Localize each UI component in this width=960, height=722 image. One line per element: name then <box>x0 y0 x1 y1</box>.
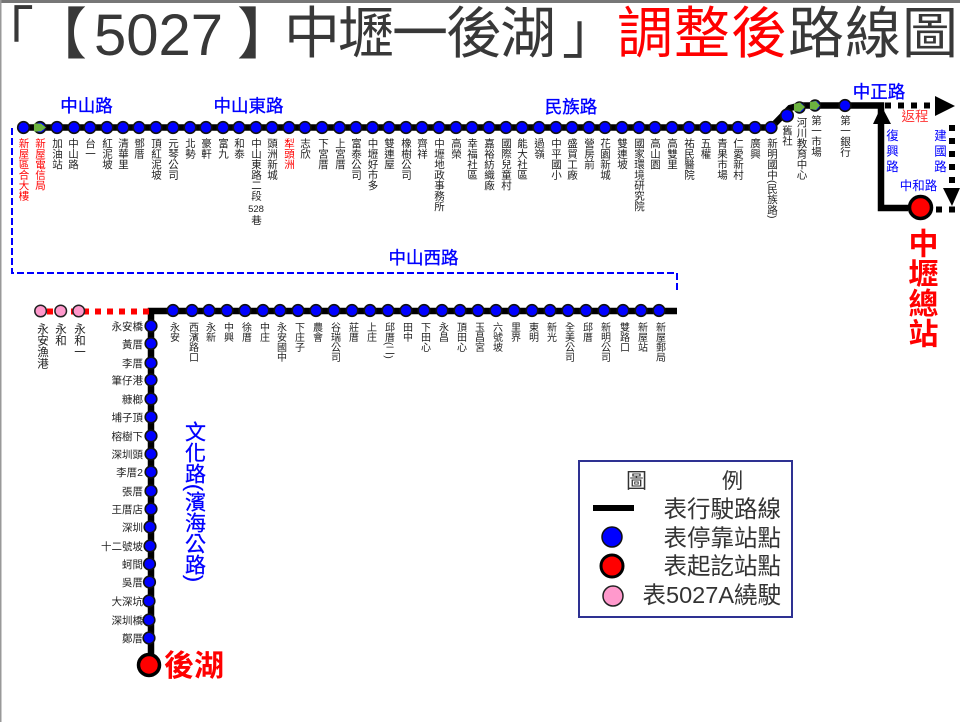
5027A stop labels <box>36 322 86 369</box>
lower stop labels: 里界 <box>508 322 520 343</box>
upper stop labels: 嘉裕紡織廠 <box>483 137 495 191</box>
upper stop labels: 過嶺 <box>533 137 545 160</box>
legend: stop: 表停靠站點 <box>664 525 781 551</box>
route: upper main line <box>18 106 908 208</box>
label: 後湖: 後湖 <box>164 650 224 683</box>
lower stop labels: 新明公司 <box>598 321 610 362</box>
legend heading: 例 <box>722 470 743 493</box>
upper stop labels: 五權 <box>700 138 712 160</box>
legend: 5027A detour: 表5027A繞駛 <box>643 582 781 608</box>
upper stop labels: 和泰 <box>233 138 245 159</box>
lower stop labels: 中庄 <box>258 321 270 343</box>
upper stop labels: 上宮厝 <box>334 138 346 170</box>
文化路 stop labels: 筆仔港 <box>112 374 143 387</box>
文化路 stop labels: 黃厝 <box>122 338 143 351</box>
upper stop labels: 仁愛新村 <box>732 138 744 180</box>
文化路 stop labels: 鄭厝 <box>122 632 143 645</box>
upper stop labels: 新屋電信局 <box>34 137 46 191</box>
upper stop labels: 清華里 <box>117 137 129 170</box>
label: 中壢總站: 中壢總站 <box>904 228 938 348</box>
lower stop labels: 西濱路口 <box>186 322 198 362</box>
legend: route line <box>593 496 781 522</box>
upper stop labels: 廣興 <box>749 137 761 160</box>
lower stop labels: 東明 <box>526 321 538 343</box>
文化路 stop labels: 深圳頭 <box>112 448 143 461</box>
upper stop labels: 雙連屋 <box>383 137 395 170</box>
lower stop labels <box>168 321 666 363</box>
upper stop labels: 第一市場 <box>810 114 822 158</box>
route: lower main line <box>151 311 677 665</box>
title: 中壢一後湖 <box>284 2 556 65</box>
upper stop labels: 北勢 <box>184 138 196 160</box>
lower stop labels: 徐厝 <box>240 321 252 343</box>
road labels: 中正路 <box>853 82 906 102</box>
文化路 stop labels: 大深坑 <box>112 595 143 608</box>
title: 」 <box>562 2 618 65</box>
legend: stop <box>602 525 781 551</box>
upper stop labels: 志欣 <box>299 137 311 160</box>
upper stop labels: 營房前 <box>583 137 595 170</box>
lower stop labels: 下田心 <box>418 322 430 352</box>
upper stop labels: 幸福社區 <box>466 138 478 180</box>
upper stop labels: 河川教育中心 <box>796 117 808 180</box>
lower stop labels: 田中 <box>400 322 412 343</box>
upper stop labels: 新屋區合大樓 <box>18 137 30 202</box>
lower stop labels: 莊厝 <box>346 321 358 343</box>
arrow: return eastward <box>935 96 955 116</box>
upper stops <box>18 100 851 133</box>
lower stop labels: 新光 <box>544 321 556 343</box>
upper stop labels: 第一銀行 <box>839 114 851 158</box>
upper stop labels: 加油站 <box>51 138 63 170</box>
upper stop labels: 元琴公司 <box>167 138 179 180</box>
lower stop labels: 農會 <box>310 321 322 342</box>
5027A stop labels: 永安漁港 <box>36 322 49 369</box>
5027A stop labels: 永和 <box>54 322 67 347</box>
upper stop labels: 國際兒童村 <box>500 138 512 190</box>
upper stop labels: 紅泥坡 <box>101 138 113 170</box>
文化路 stop labels: 榕樹下 <box>112 430 143 443</box>
文化路 stop labels: 王厝店 <box>112 503 143 516</box>
upper stop labels: 齊祥 <box>416 137 428 160</box>
upper stop labels: 高山園 <box>649 137 661 170</box>
lower stop labels: 永昌 <box>436 321 448 343</box>
lower stop labels: 邱厝 <box>580 321 592 343</box>
road labels: 文化路(濱海公路) <box>182 421 206 582</box>
文化路 stops <box>143 320 157 644</box>
upper stop labels: 富九 <box>217 137 229 159</box>
5027A stops <box>35 305 84 317</box>
upper stop labels: 花園新城 <box>599 137 611 181</box>
upper stop labels: 中平國小 <box>550 137 562 181</box>
title: 】 <box>237 3 293 66</box>
panel: legend <box>579 461 792 617</box>
文化路 stop labels: 深圳橋 <box>112 614 143 627</box>
upper stop labels: 中壢地政事務所 <box>433 137 445 212</box>
upper stop labels: 鄧厝 <box>133 138 145 160</box>
title: 5027 <box>94 3 223 68</box>
upper stop labels: 橡樹公司 <box>400 137 412 180</box>
lower stop labels: 雙路口 <box>618 321 630 352</box>
legend heading: 圖 <box>626 470 647 493</box>
road labels: 建國路 <box>932 129 946 176</box>
文化路 stop labels: 李厝 <box>122 358 143 370</box>
lower stop labels: 永安國中 <box>274 321 286 363</box>
lower stop labels: 玉昌宮 <box>472 322 484 353</box>
upper stop labels: 雙連坡 <box>616 137 628 170</box>
title: 【 <box>31 3 87 66</box>
terminal stop: 中壢總站 <box>910 196 932 218</box>
upper stop labels: 青果市場 <box>716 137 728 181</box>
文化路 stop labels: 蚵間 <box>122 559 143 571</box>
5027A stop labels: 永和一 <box>73 322 86 358</box>
road labels: 中山路 <box>60 96 113 116</box>
lower stop labels: 永新 <box>204 321 216 343</box>
route: 5027A dotted branch <box>47 308 150 314</box>
road labels: 中山東路 <box>214 96 284 116</box>
legend: terminal <box>601 553 781 579</box>
upper stop labels: 國家環境研究院 <box>633 138 645 212</box>
upper stop labels: 高雙里 <box>666 137 678 170</box>
lower stops <box>167 305 665 316</box>
upper stop labels: 盛貿工廠 <box>566 137 578 181</box>
lower stop labels: 六號坡 <box>490 322 502 353</box>
文化路 stop labels: 永安橋 <box>112 320 143 333</box>
title <box>0 2 958 68</box>
upper stop labels: 富泰公司 <box>350 137 362 180</box>
文化路 stop labels: 張厝 <box>122 486 143 498</box>
upper stop labels: 528 <box>248 204 264 215</box>
upper stop labels: 犁頭洲 <box>283 137 295 170</box>
lower stop labels: 中興 <box>222 321 234 343</box>
road labels: 中和路 <box>900 178 938 193</box>
upper stop labels: 祐民醫院 <box>683 137 695 181</box>
legend: route line: 表行駛路線 <box>664 496 781 522</box>
文化路 stop labels: 糠榔 <box>122 393 143 406</box>
lower stop labels: 新屋郵局 <box>654 321 666 363</box>
route: dashed connector 中山西路 <box>12 128 677 292</box>
upper stop labels: 中山東路二段 <box>250 137 262 202</box>
route: return dotted line <box>885 106 958 210</box>
road labels: 復興路 <box>884 129 898 176</box>
lower stop labels: 邱厝(二) <box>382 321 394 359</box>
road labels: 中山西路 <box>388 248 459 268</box>
upper stop labels: 巷 <box>250 215 262 226</box>
title: 調整後 <box>617 2 787 65</box>
upper stop labels: 高榮 <box>450 137 462 160</box>
terminal stop: 後湖 <box>138 654 160 676</box>
upper stop labels: 台一 <box>84 137 96 159</box>
lower stop labels: 下庄子 <box>292 322 304 352</box>
title: 路線圖 <box>788 2 958 65</box>
upper stop labels: 能大社區 <box>516 137 528 180</box>
icon: transfer stop markers <box>34 101 820 132</box>
lower stop labels: 上庄 <box>364 322 376 343</box>
road labels: 返程 <box>902 109 928 124</box>
lower stop labels: 全美公司 <box>562 322 574 362</box>
lower stop labels: 頂田心 <box>454 322 466 352</box>
文化路 stop labels: 十二號坡 <box>101 540 143 553</box>
upper stop labels: 舊社 <box>781 124 793 147</box>
upper stop labels: 頂紅泥坡 <box>150 138 162 181</box>
road labels: 民族路 <box>545 97 598 117</box>
legend heading <box>626 470 743 493</box>
upper stop labels: 新明國中(民族路) <box>766 137 778 218</box>
upper stop labels: 中山路 <box>67 137 79 170</box>
arrow: 建國路 downward <box>943 188 960 206</box>
lower stop labels: 新屋站 <box>636 321 648 353</box>
upper stop labels: 中壢好市多 <box>366 137 378 191</box>
文化路 stop labels: 埔子頂 <box>112 411 143 424</box>
upper stop labels: 頭洲新城 <box>266 138 278 181</box>
upper stop labels <box>18 114 851 226</box>
road labels <box>60 82 946 582</box>
文化路 stop labels: 吳厝 <box>122 577 143 589</box>
arrow: 復興路 upward <box>873 106 891 124</box>
upper stop labels: 下宮厝 <box>317 138 329 170</box>
legend: terminal: 表起訖站點 <box>664 553 781 579</box>
lower stop labels: 谷瑞公司 <box>328 322 340 362</box>
文化路 stop labels: 深圳 <box>122 521 143 534</box>
lower stop labels: 永安 <box>168 321 180 343</box>
upper stop labels: 豪軒 <box>200 137 212 160</box>
文化路 stop labels: 李厝2 <box>116 467 143 479</box>
文化路 stop labels <box>101 320 143 645</box>
